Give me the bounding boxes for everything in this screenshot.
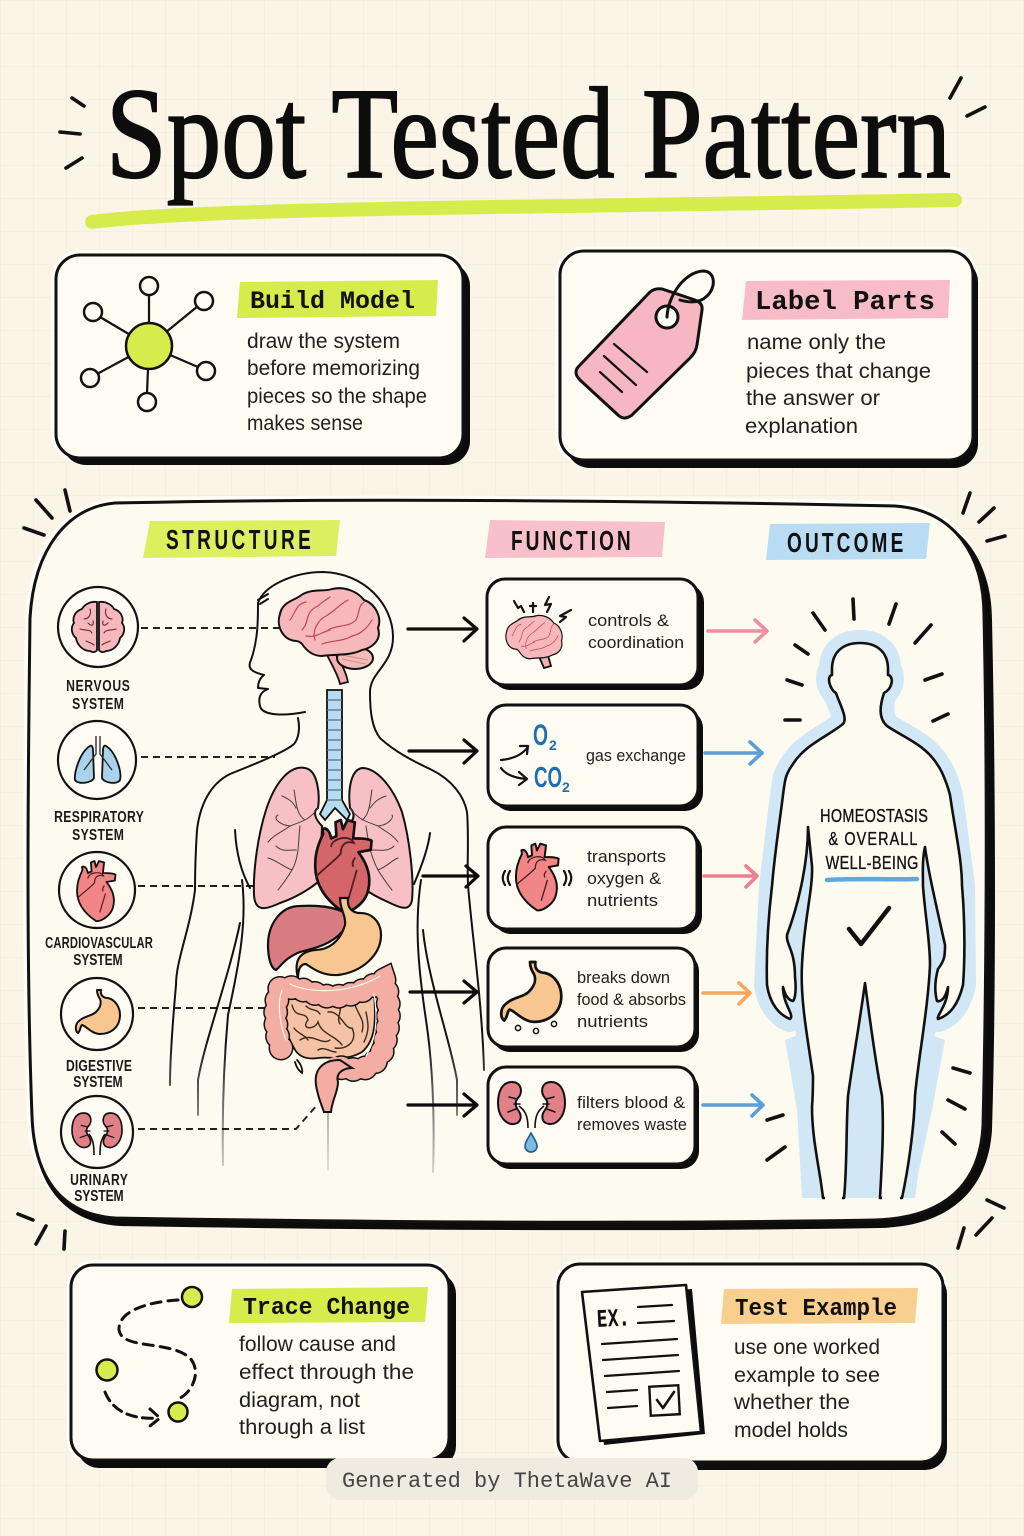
text: oxygen &	[587, 869, 662, 888]
panel: label parts	[560, 251, 978, 468]
text: breaks down	[577, 968, 670, 987]
icon: worksheet: EX.	[596, 1305, 630, 1333]
panel: trace change	[71, 1265, 456, 1468]
outcome label	[820, 805, 928, 873]
icon: gases	[501, 719, 570, 795]
icon: check mark	[849, 908, 889, 944]
text	[587, 847, 666, 910]
text: label parts	[745, 331, 931, 438]
icon: tag	[576, 271, 713, 418]
heart	[315, 820, 372, 912]
label: respiratory system	[54, 808, 144, 845]
text: build model: makes sense	[247, 412, 363, 435]
function card: respiratory	[488, 705, 703, 811]
dashed leader lines	[138, 628, 318, 1129]
icon: urinary system	[61, 1096, 133, 1168]
heading: outcome: OUTCOME	[787, 527, 903, 559]
text: build model: before memorizing	[247, 357, 420, 380]
icon: cardiovascular system	[59, 852, 135, 928]
label: digestive system: DIGESTIVE	[66, 1057, 132, 1076]
heading: structure	[143, 520, 340, 558]
icon: beating heart	[503, 844, 571, 910]
panel: build model	[56, 255, 470, 465]
panel: main diagram frame	[28, 500, 995, 1230]
outcome figure	[767, 599, 970, 1198]
function card: cardiovascular	[488, 827, 702, 934]
lungs	[254, 768, 413, 908]
label: respiratory system: RESPIRATORY	[54, 808, 144, 827]
icon: respiratory system	[58, 721, 136, 799]
heading: test example	[721, 1288, 918, 1324]
halo rays	[767, 599, 970, 1160]
text: filters blood &	[577, 1093, 686, 1112]
text: gas exchange	[586, 746, 686, 765]
heading: trace change	[229, 1287, 428, 1323]
text: build model: pieces so the shape	[247, 385, 427, 408]
heading: build model: Build Model	[250, 287, 415, 316]
large intestine	[276, 976, 388, 1112]
icon: kidneys and drop	[498, 1082, 565, 1152]
label: urinary system	[70, 1171, 128, 1206]
icon: network	[81, 277, 215, 411]
watermark: Generated by ThetaWave AI	[342, 1469, 672, 1494]
label: digestive system: SYSTEM	[73, 1073, 123, 1092]
label: urinary system: URINARY	[70, 1171, 128, 1190]
text: test example: whether the	[733, 1391, 850, 1414]
label: nervous system: NERVOUS	[66, 677, 130, 696]
icon: panel corner sparks	[18, 490, 1005, 1249]
text: food & absorbs	[577, 990, 686, 1009]
text: nutrients	[577, 1012, 648, 1031]
label: nervous system: SYSTEM	[72, 695, 124, 714]
text: test example	[733, 1336, 880, 1442]
text: test example: example to see	[734, 1364, 880, 1387]
text: test example: model holds	[734, 1419, 848, 1442]
heading: function	[485, 520, 665, 558]
heading: label parts	[742, 280, 950, 320]
text: label parts: explanation	[745, 415, 858, 438]
text: transports	[587, 847, 666, 866]
small intestine	[284, 992, 375, 1059]
heading: trace change: Trace Change	[243, 1295, 410, 1322]
heading: label parts: Label Parts	[755, 288, 935, 318]
text	[577, 1093, 687, 1134]
icon: gases: 2	[549, 737, 557, 753]
text: label parts: the answer or	[746, 387, 880, 410]
function card: nervous	[487, 579, 704, 690]
function card: digestive	[488, 948, 699, 1052]
stomach	[297, 898, 381, 978]
icon: title sparks	[60, 78, 985, 168]
text: removes waste	[577, 1115, 687, 1134]
function card: urinary	[488, 1067, 699, 1169]
heading: outcome	[766, 523, 930, 560]
text: nutrients	[587, 891, 658, 910]
text: build model: draw the system	[247, 330, 400, 353]
text: controls &	[588, 611, 670, 630]
label: digestive system	[66, 1057, 132, 1092]
icon: gases: 2	[562, 779, 570, 795]
heading: test example: Test Example	[735, 1296, 897, 1323]
label: respiratory system: SYSTEM	[72, 826, 124, 845]
text: trace change: diagram, not	[239, 1389, 360, 1412]
text: coordination	[588, 633, 684, 652]
text: build model	[247, 330, 427, 435]
panel: test example	[558, 1264, 947, 1470]
text	[577, 968, 686, 1031]
text: test example: use one worked	[734, 1336, 880, 1359]
trachea	[320, 690, 350, 820]
underline	[827, 879, 917, 880]
label: nervous system	[66, 677, 130, 714]
body outline	[170, 572, 484, 1172]
label: urinary system: SYSTEM	[74, 1187, 124, 1206]
text: trace change: through a list	[239, 1416, 365, 1439]
blue aura	[767, 643, 963, 1198]
text: trace change	[239, 1333, 414, 1439]
outcome label: HOMEOSTASIS	[820, 805, 928, 826]
text: label parts: name only the	[747, 331, 886, 354]
text	[588, 611, 684, 652]
anatomy figure	[170, 572, 484, 1172]
watermark	[326, 1458, 698, 1500]
text: trace change: follow cause and	[239, 1333, 396, 1356]
icon: stomach with nutrients	[501, 962, 561, 1034]
icon: brain with sparks	[506, 597, 571, 668]
brain	[279, 588, 379, 684]
text: label parts: pieces that change	[746, 360, 931, 383]
body silhouette	[767, 643, 964, 1198]
outcome label: WELL-BEING	[826, 852, 918, 873]
arrows: function to outcome	[703, 620, 767, 1116]
icon: gases: O	[533, 719, 548, 752]
arrows: structure to function	[408, 618, 478, 1116]
organ icons and labels	[45, 587, 153, 1206]
icon: gases: CO	[534, 762, 562, 794]
label: cardiovascular system: CARDIOVASCULAR	[45, 933, 153, 951]
heading: function: FUNCTION	[511, 525, 631, 557]
icon: nervous system	[58, 587, 138, 667]
icon: digestive system	[61, 978, 133, 1050]
label: cardiovascular system	[45, 933, 153, 970]
label: cardiovascular system: SYSTEM	[73, 951, 123, 970]
icon: worksheet	[582, 1285, 705, 1445]
heading: build model	[237, 280, 438, 318]
text: trace change: effect through the	[239, 1361, 414, 1384]
liver	[268, 906, 346, 970]
heading: structure: STRUCTURE	[166, 524, 311, 556]
outcome label: & OVERALL	[829, 828, 917, 849]
icon: dashed path	[96, 1287, 202, 1426]
